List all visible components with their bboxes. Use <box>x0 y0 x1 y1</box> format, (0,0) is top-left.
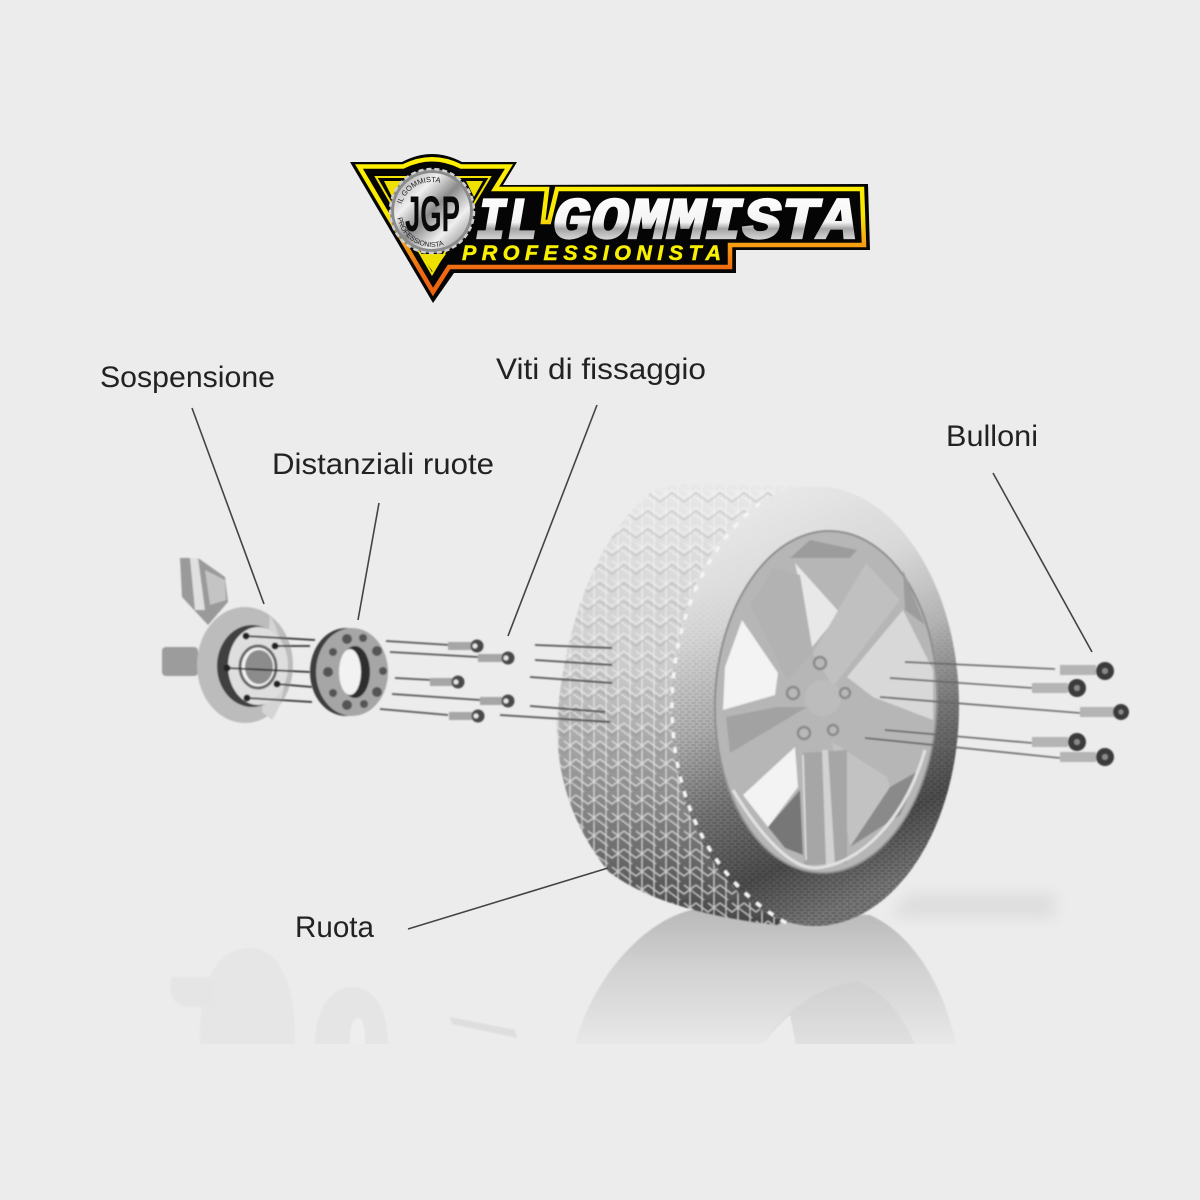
logo wordmark: IL <box>476 191 538 256</box>
bolts: wheel nuts <box>865 662 1129 766</box>
bolt reflection <box>450 1017 517 1038</box>
label: Bulloni: Bulloni <box>946 420 1038 453</box>
emblem: JGP <box>405 186 460 242</box>
leader line: Ruota <box>408 868 608 929</box>
floor shadow <box>900 894 1054 916</box>
emblem: IL GOMMISTA <box>396 176 440 204</box>
rim windows <box>723 620 778 710</box>
leader line: Distanziali ruote <box>358 503 379 620</box>
hub reflection <box>170 948 295 1045</box>
rim barrel <box>709 527 943 877</box>
logo black silhouette <box>350 154 870 303</box>
leader line: Viti di fissaggio <box>508 405 597 636</box>
tire tread <box>556 492 782 926</box>
rim lip highlight <box>733 750 925 868</box>
tire sidewall <box>671 486 959 926</box>
rim top band <box>790 540 857 558</box>
rim lower right pockets <box>832 742 890 847</box>
alloy rim <box>709 527 943 877</box>
logo frame band <box>359 159 864 292</box>
label: Ruota: Ruota <box>295 911 374 944</box>
rim hub <box>805 680 841 716</box>
logo corner triangles <box>376 177 490 274</box>
label: Distanziali ruote: Distanziali ruote <box>272 448 494 481</box>
hub assembly: suspension <box>162 558 315 723</box>
logo tagline: PROFESSIONISTA <box>462 241 721 265</box>
brake disc <box>197 607 293 723</box>
hub studs <box>224 632 315 702</box>
logo wordmark: GOMMISTA <box>553 191 857 256</box>
wheel reflection <box>575 908 956 1045</box>
strut bracket <box>180 558 228 625</box>
logo: Il Gommista Professionista <box>350 154 870 303</box>
label: Viti di fissaggio: Viti di fissaggio <box>496 353 706 386</box>
leader line: Sospensione <box>192 408 264 604</box>
axle stub <box>162 647 198 676</box>
spacer reflection <box>315 987 388 1045</box>
leader line: Bulloni <box>993 473 1092 652</box>
wheel spacer <box>310 628 388 716</box>
wheel <box>557 484 959 926</box>
rim right face <box>847 610 933 720</box>
rim spokes <box>796 574 810 640</box>
exploded diagram photo area <box>162 484 1129 1045</box>
bolts: fixing screws <box>380 640 612 722</box>
emblem <box>388 168 476 254</box>
emblem: PROFESSIONISTA <box>398 217 444 247</box>
label: Sospensione: Sospensione <box>100 361 275 394</box>
